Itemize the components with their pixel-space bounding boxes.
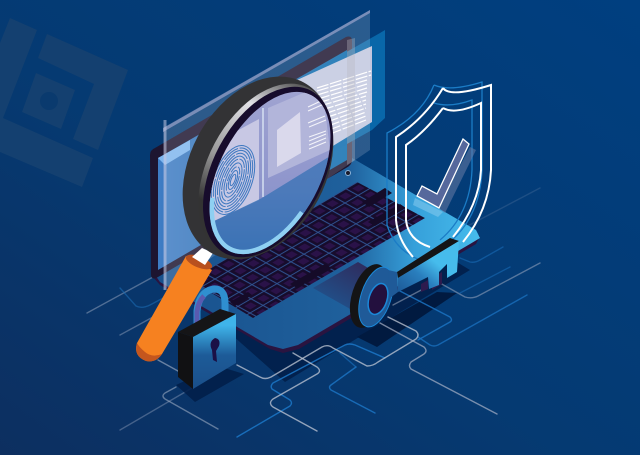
document text [317,71,371,134]
laptop shadow [215,240,470,382]
shield base glow [413,198,443,217]
shackle [197,289,225,334]
trackpad [313,262,395,310]
shield outer outline [396,85,491,257]
circuit lines [87,188,540,437]
padlock [176,289,244,402]
power button [346,170,350,176]
document panel [297,30,385,172]
glass panel edge [163,10,370,132]
magnifying glass [136,76,334,362]
handle [136,248,214,361]
lens edge highlight [210,198,304,254]
key [343,238,459,333]
logo watermark [0,18,128,187]
keyboard [190,182,425,318]
shield inner outline [406,103,481,247]
check mark shadow [438,147,476,213]
lens text lines [308,100,326,149]
fingerprint [210,145,256,215]
lens interior [210,92,330,254]
shield back outline [387,82,482,260]
laptop base [153,158,480,353]
long keys [230,188,406,306]
glass overlay strip [347,38,355,165]
laptop screen [150,10,385,290]
check mark [417,139,469,208]
keyhole [211,338,220,362]
shield [387,82,491,260]
glass panel [164,10,370,290]
lens rim [152,50,364,286]
